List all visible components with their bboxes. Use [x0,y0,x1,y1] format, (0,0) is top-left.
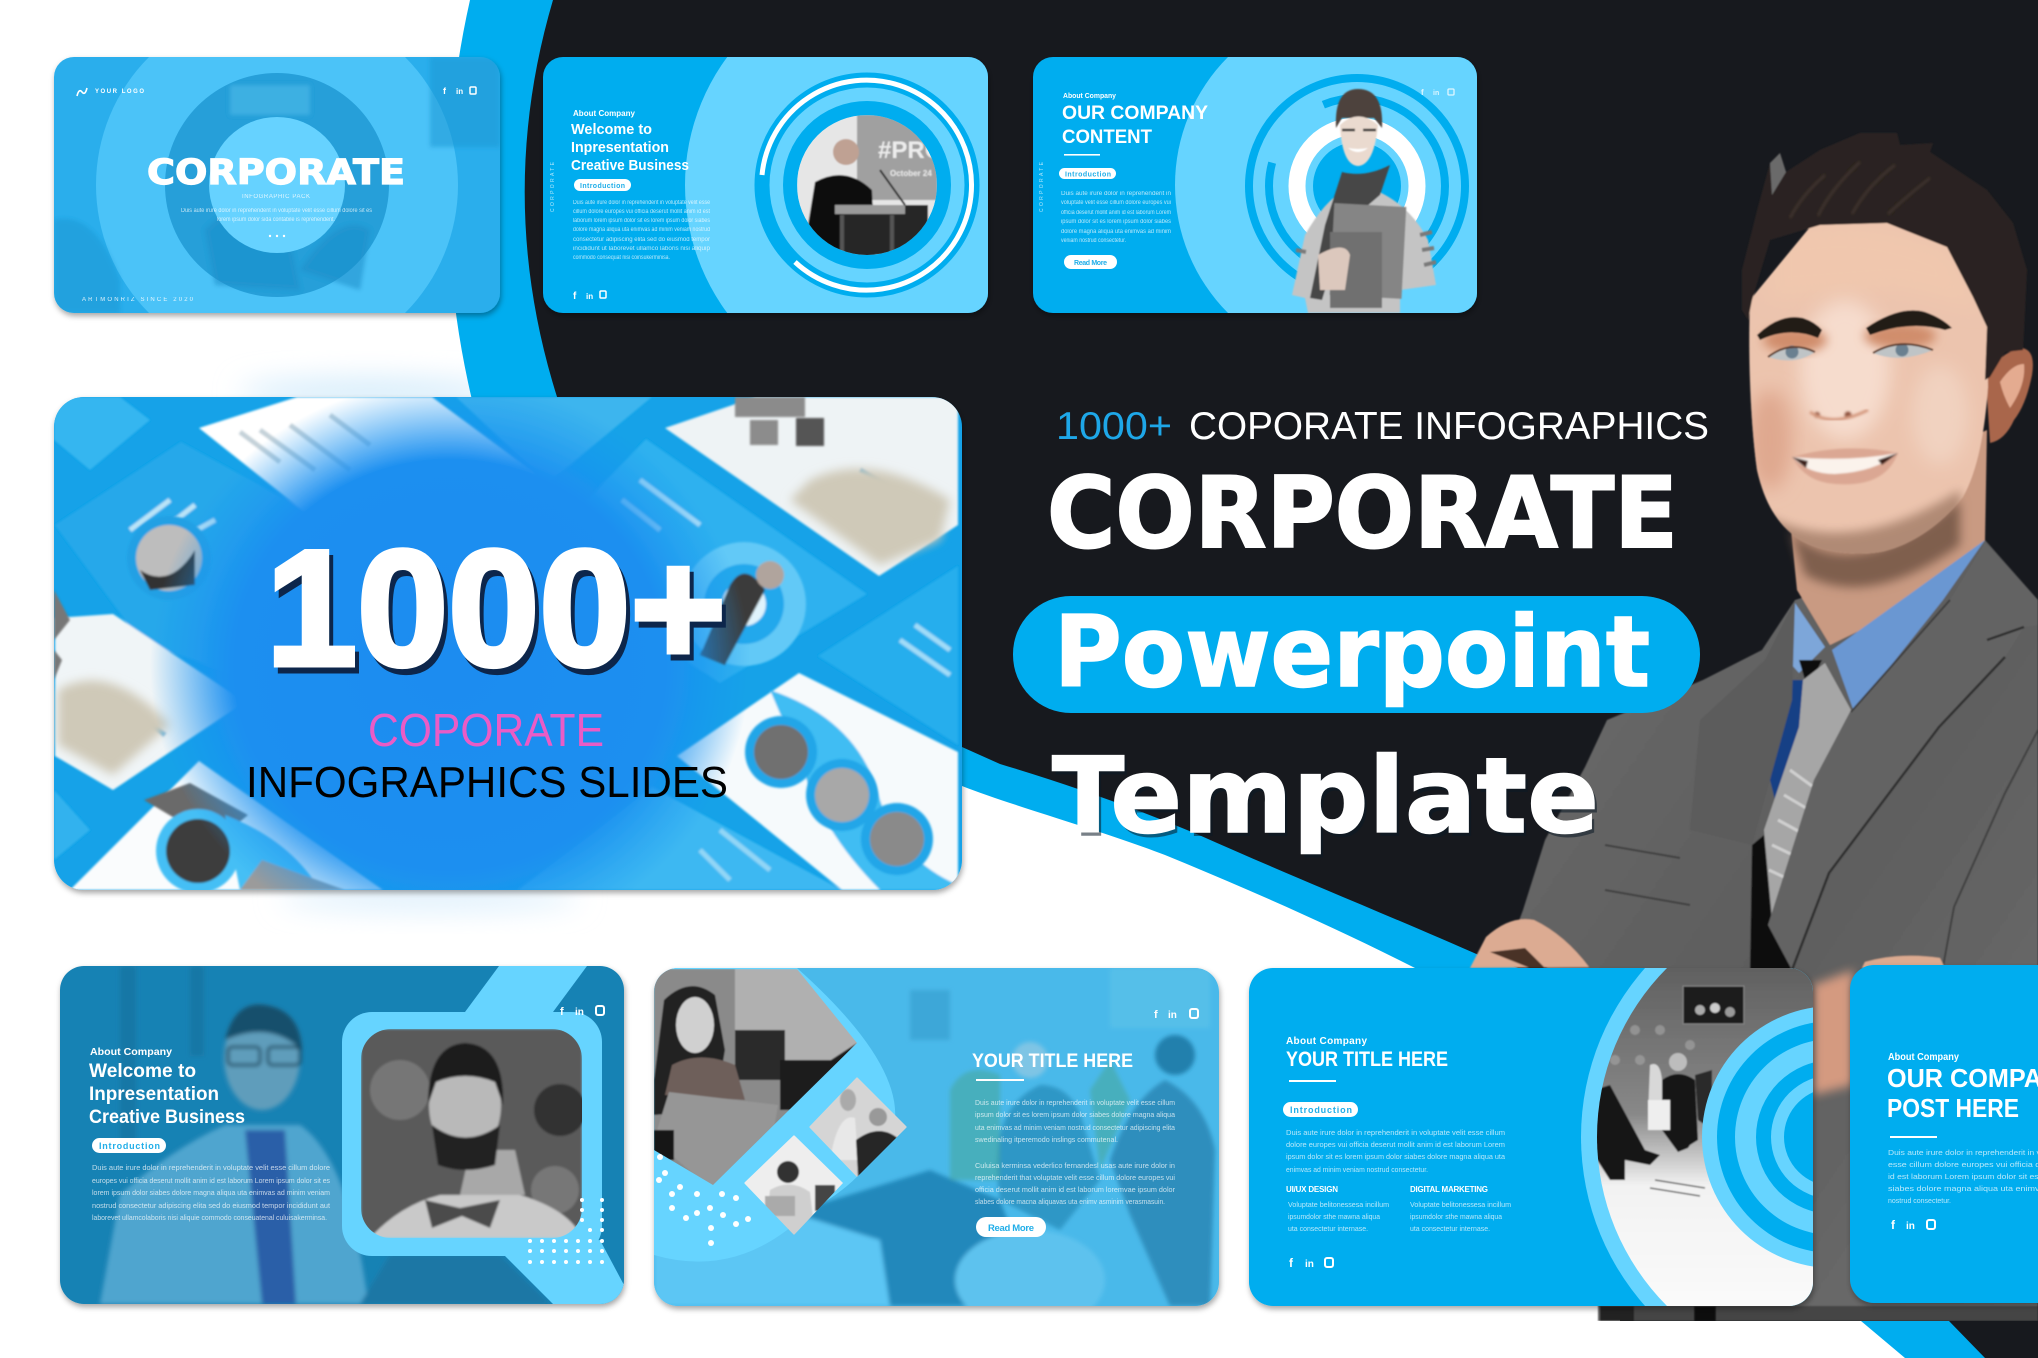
social icons [443,86,476,96]
heading: Creative Business [571,157,689,174]
body text: reprehenderit that voluptate velit esse cillum dolore europes vui [975,1173,1175,1182]
heading: YOUR TITLE HERE [972,1051,1133,1072]
diamond photo: woman with laptop [744,1135,844,1235]
description: lorem ipsum dolor sida contabile is reprehenderit. [217,217,335,223]
column: UI/UX Design: uta consectetur internase. [1288,1224,1368,1233]
introduction pill [574,179,631,191]
headline CORPORATE: CORPORATE [1047,457,1678,571]
kicker line: 1000+ [1056,405,1172,448]
speaker photo [797,115,937,255]
heading: YOUR TITLE HERE [1286,1048,1448,1071]
social icons [573,290,607,299]
diamond photo: meeting [809,1077,907,1177]
face shading [1752,234,1969,554]
slide card: Your Title Here with diamond photos [654,968,1219,1330]
navy shirt shadow [1770,680,1804,798]
body text: ipsum dolor sit es lorem ipsum dolor siabes dolore magna aliqua uta [1286,1152,1506,1161]
description [181,208,372,223]
social icons: in [1305,1259,1314,1270]
introduction pill: Introduction [1065,172,1111,178]
social icons: f [560,1006,564,1018]
body text: europes vui officia deserut mollit anim id est laborum Lorem ipsum dolor sit es [92,1176,330,1185]
heading [89,1047,245,1128]
light blue frame shapes [342,966,624,1304]
column: Digital Marketing: ipsumdolor sthe mawna aliqua [1410,1212,1503,1221]
body text [92,1163,330,1222]
introduction pill: Introduction [580,183,625,190]
social icons [1421,88,1454,97]
left hand [1470,919,1589,968]
heading: Welcome to [89,1061,196,1082]
column: UI/UX Design: UI/UX DESIGN [1286,1185,1338,1194]
body text: swedinaling itperemodo inslings commutenal. [975,1135,1118,1144]
slide card: CORPORATE infographic pack [52,56,504,320]
body text: lorem ipsum dolor siabes dolore magna aliqua uta enimvas ad minim veniam [92,1188,330,1197]
body text: Duis aute irure dolor in reprehenderit in voluptate velit esse [573,200,711,206]
body text: uta enimvas ad minim veniam nostrud consectetur adipiscing elita [975,1123,1176,1132]
body text: Duis aute irure dolor in reprehenderit in voluptate velit esse cillum dolore [92,1163,330,1172]
body text: laborum lorem ipsum dolor sit es lorem ipsum dolor siabes [573,218,710,224]
social icons: f [1154,1009,1158,1021]
Powerpoint pill: Powerpoint [1054,596,1650,710]
smile [1792,448,1898,484]
eyebrows [1757,317,1822,340]
body text: officia deserut mollit anim id est laborum loremvae ipsum dolor [975,1185,1176,1194]
column: Digital Marketing: uta consectetur internase. [1410,1224,1490,1233]
big number: 1000+ [270,522,730,706]
column: UI/UX Design [1286,1185,1389,1233]
body text [1888,1148,2038,1205]
body text: Duis aute irure dolor in reprehenderit in [1061,191,1171,197]
body text: laborevet ullamcolaboris nisi aliquie commodo conseuatenal culuisakerminsa. [92,1213,327,1222]
body text: dolore magna aliqua uta enimvas ad minim [1061,229,1171,235]
column: UI/UX Design: Voluptate belitonessesa incillum [1288,1200,1389,1209]
body text: dolore magna aliqua uta enimvas ad minim veniam nostrud [573,227,710,233]
body text: nostrud consectetur adipiscing elita sed do eiusmod tempor incididunt aut [92,1201,330,1210]
face [1749,215,1988,554]
tilted slide tiles [54,397,958,890]
concentric rings [1249,78,1465,294]
body text: ipsum dolor sit es lorem ipsum dolor siabes dolore magna aliqua [975,1110,1176,1119]
dot pattern [528,1198,604,1264]
heading: Inpresentation [89,1084,219,1105]
heading: Inpresentation [571,139,669,156]
tie [1764,660,1851,917]
speaker photo: October 24 [890,169,932,178]
main card: 1000+ corporate infographic slides collage [54,380,962,950]
background man photo [100,966,550,1304]
slide title: CORPORATE [147,153,405,193]
tile portraits [127,516,211,600]
headline Template: Template [1052,735,1599,857]
body text: veniam nostrud consectetur. [1061,238,1126,244]
social icons [560,1006,604,1018]
slide card: Welcome to Inpresentation [543,57,988,314]
introduction pill [92,1138,166,1153]
body text: commodo consequat nisi coinsukerminisa. [573,255,670,261]
concentric rings [1702,1006,1964,1268]
body text [1286,1128,1506,1174]
photo: businessman with crossed arms [1470,133,2038,1321]
social icons: in [586,292,593,301]
heading: Creative Business [89,1107,245,1128]
heading: About Company [1063,93,1116,100]
heading: About Company [573,109,636,118]
read more button [976,1217,1046,1237]
heading: POST HERE [1887,1093,2019,1123]
heading [1887,1052,2038,1123]
shirt and collar [1832,540,1985,712]
dots [269,235,285,237]
ring graphic [762,80,972,290]
introduction pill [1283,1102,1358,1117]
body text: Duis aute irure dolor in reprehenderit in voluptate velit esse cillum [1286,1128,1505,1137]
social icons [1891,1218,1935,1232]
heading [1062,93,1208,148]
vertical label: CORPORATE [1039,161,1045,212]
column: Digital Marketing: DIGITAL MARKETING [1410,1185,1488,1194]
social icons: f [1891,1218,1896,1232]
body text [573,200,711,261]
introduction pill [1059,168,1116,179]
neck [1790,430,1987,645]
subtitle pink: COPORATE [368,704,604,756]
body text: voluptate velit esse cillum dolore europes vui [1061,200,1171,206]
speaker photo: #PROD [878,137,961,164]
subtitle black: INFOGRAPHICS SLIDES [246,758,728,807]
background photo tint [54,57,500,313]
body text: cillum dolore europes vui officia deserut mollit anim id est [573,209,710,215]
description: Duis aute irure dolor in reprehenderit in voluptate velit esse cillum dolore sit es [181,208,372,214]
heading: About Company [90,1047,172,1058]
nose [1810,410,1868,420]
read more button: Read More [988,1223,1034,1234]
tile text lines [120,415,950,880]
body text: incididunt ut laborevet ullamco laboris nisi aliquip [573,246,711,252]
social icons [1289,1256,1333,1270]
body text: nostrud consectetur. [1888,1196,1951,1205]
light shape [654,968,895,1262]
heading [571,109,689,174]
blue centre glow [150,380,750,950]
student photo [1292,89,1436,313]
column: Digital Marketing: Voluptate belitonessesa incillum [1410,1200,1511,1209]
heading: OUR COMPANY [1062,103,1208,124]
introduction pill: Introduction [99,1141,160,1151]
subtitle: INFOGRAPHIC PACK [242,194,310,200]
social icons: f [573,291,577,302]
background office photo [654,968,1215,1330]
slide card: Our Company Content [1033,57,1477,314]
body text: enimvas ad minim veniam nostrud consectetur. [1286,1165,1428,1174]
logo: YOUR LOGO [95,89,144,95]
body text [975,1098,1176,1206]
read more button [1064,255,1117,269]
column: Digital Marketing [1410,1185,1511,1233]
footer: ARTMONRIZ SINCE 2020 [82,297,194,303]
column: UI/UX Design: ipsumdolor sthe mawna aliqua [1288,1212,1381,1221]
heading: About Company [1286,1036,1367,1047]
heading [1286,1036,1448,1071]
ear [1986,348,2033,443]
lapels [1766,694,1868,968]
social icons [1154,1009,1198,1021]
social icons: in [575,1007,584,1018]
large photo [654,969,864,1190]
body text: consectetur adipiscing elita sed do eiusmod tempor [573,237,710,243]
body text: officia deserut mollit anim id est laborum Lorem [1061,210,1171,216]
slide card: Your Title Here with panel photo [1249,882,2038,1358]
tile photos, beige smudges [58,469,950,775]
vertical label: CORPORATE [550,161,556,212]
heading: Welcome to [571,121,652,138]
big number: 1000+ [266,516,726,700]
logo [77,88,144,96]
jacket seams [1605,730,2038,967]
body text: slabes dolore macna aliquavas uta enimv asminim verasmasuin. [975,1197,1165,1206]
social icons: in [1433,90,1439,97]
black shirt gap [1750,835,1792,970]
suit jacket [1510,540,2038,1321]
read more button: Read More [1074,260,1107,267]
social icons: in [1168,1010,1177,1021]
slide card: Our Company Post Here (cropped) [1850,965,2038,1303]
body text: Duis aute irure dolor in reprehenderit in voluptate velit esse cillum [975,1098,1175,1107]
social icons: f [1289,1256,1294,1270]
social icons: f [1421,88,1424,97]
body text: Culuisa kerminsa vederlico fernandesl usas aute irure dolor in [975,1161,1175,1170]
kicker line: COPORATE INFOGRAPHICS [1189,405,1709,448]
body text: ipsum dolor sit es lorem ipsum dolor siabes [1061,219,1171,225]
social icons: f [443,86,447,96]
heading: CONTENT [1062,127,1152,148]
social icons: in [456,87,463,96]
dot pattern [656,1154,751,1246]
right hand between cards [1813,970,1853,1095]
social icons: in [1906,1221,1915,1232]
body text: dolore europes vui officia deserut mollit anim id est laborum Lorem [1286,1140,1505,1149]
headline Template: Template [1055,739,1602,861]
panel discussion photo [1594,898,1837,1358]
body text [1061,191,1171,244]
hair [1742,133,2027,380]
heading: About Company [1888,1052,1959,1063]
slide card: Welcome with portrait frame [60,966,624,1304]
headline block [1013,405,1709,861]
introduction pill: Introduction [1290,1105,1352,1115]
portrait photo [361,1029,586,1238]
eyes [1768,344,1933,361]
